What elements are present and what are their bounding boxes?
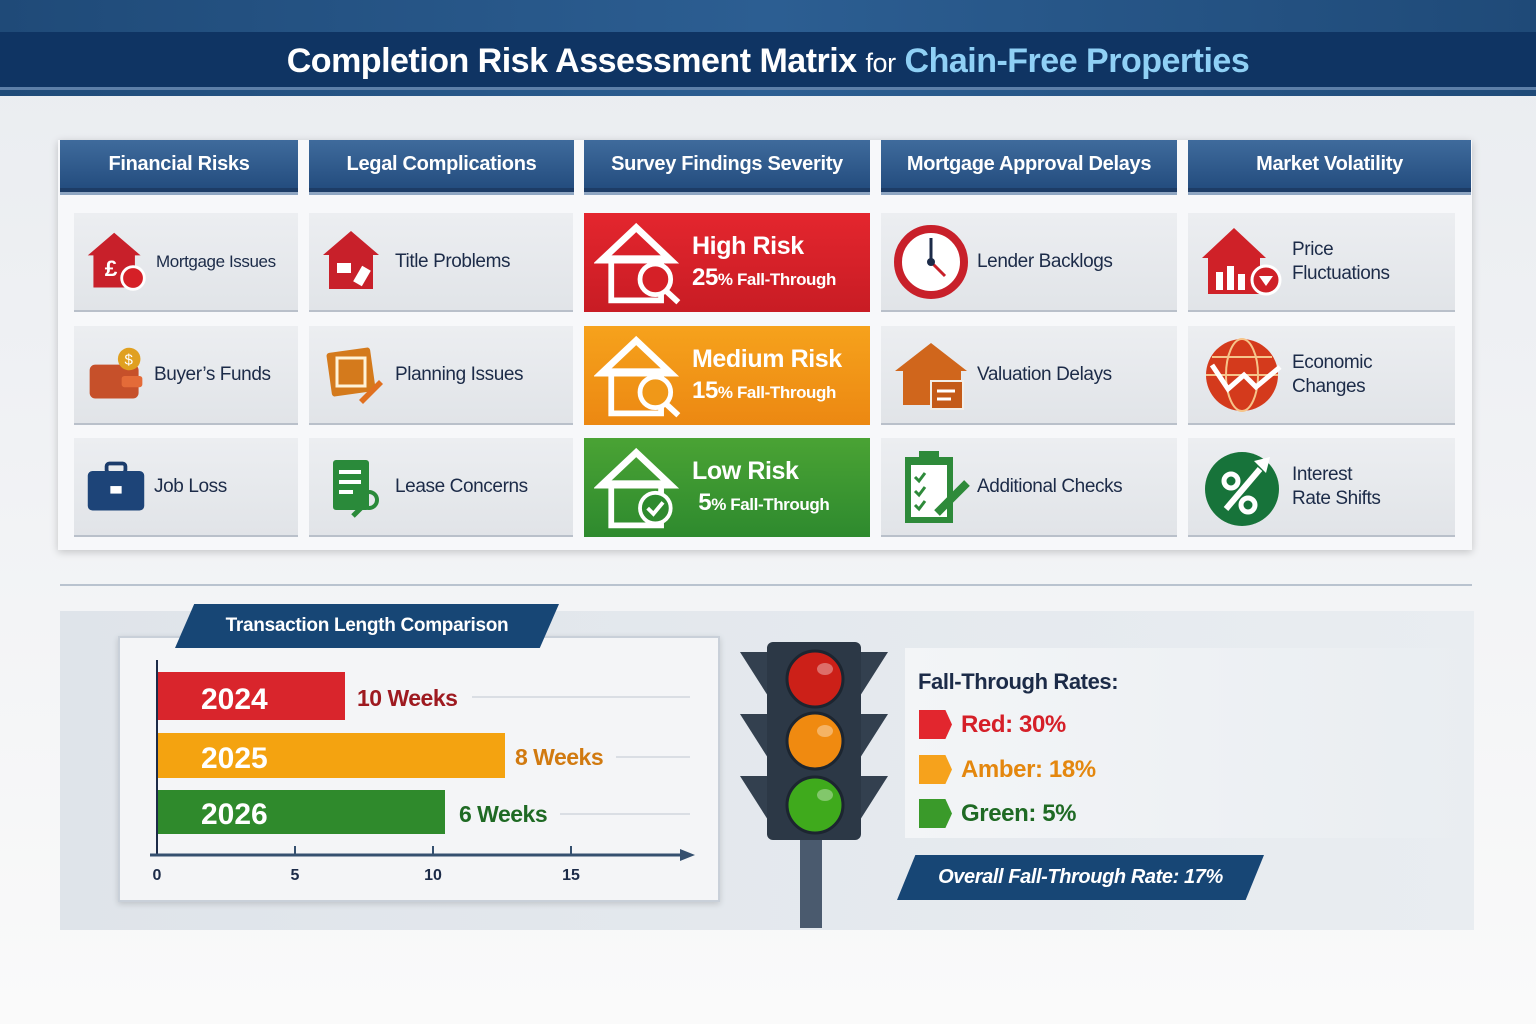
cell: Price Fluctuations: Price [1292,238,1333,260]
cell: Interest Rate Shifts: Interest [1292,464,1352,484]
cell: Economic Changes: Changes [1292,376,1365,396]
cell: Economic Changes: Economic [1292,352,1372,372]
heading: Financial Risks: Financial Risks [108,152,250,174]
cell: Economic Changes [1188,326,1455,425]
chart: transaction length: 2024 [201,683,268,716]
legend: amber: Amber: 18% [961,756,1096,782]
cell: Lease Concerns [309,438,573,537]
panel: matrix [58,140,1472,550]
cell: Mortgage Issues: £ [105,256,118,281]
heading: Mortgage Approval Delays [881,140,1177,192]
legend: fall-through rates [905,648,1148,838]
cell: Price Fluctuations: Fluctuations [1292,262,1390,284]
cell: Medium Risk [584,326,870,425]
heading: Transaction Length Comparison [175,604,559,648]
cell: Buyer's Funds: Buyer’s Funds [154,364,271,384]
cell: Job Loss: Job Loss [154,476,227,496]
cell: Lease Concerns: Lease Concerns [395,476,528,496]
heading: Market Volatility [1188,140,1471,192]
heading: Legal Complications: Legal Complications [347,152,536,174]
cell: Price Fluctuations [1188,213,1455,312]
cell: High Risk: 25% Fall-Through [692,264,836,290]
heading: Mortgage Approval Delays: Mortgage Approval Delays [907,152,1151,174]
cell: High Risk: High Risk [692,232,804,260]
chart: transaction length: 10 [424,867,442,884]
heading: Legal Complications [309,140,574,192]
legend: red [919,710,1066,739]
cell: Additional Checks [881,438,1177,537]
cell: Planning Issues: Planning Issues [395,364,523,384]
heading: Survey Findings Severity: Survey Findings Severity [611,152,843,174]
chart: transaction length: 15 [562,867,580,884]
cell: Low Risk: 5% Fall-Through [698,488,829,516]
cell: Mortgage Issues [74,213,298,312]
cell: Additional Checks: Additional Checks [977,476,1122,496]
callout: overall rate: Overall Fall-Through Rate: 17% [938,866,1223,888]
chart: transaction length: 5 [291,867,300,884]
cell: Interest Rate Shifts [1188,438,1455,537]
heading: Market Volatility: Market Volatility [1256,152,1403,174]
title: Completion Risk Assessment Matrix for Chain-Free Properties [287,42,1249,80]
cell: Buyer's Funds [74,326,298,425]
legend: green [919,799,1076,828]
cell: Lender Backlogs [881,213,1177,312]
cell: Low Risk [584,438,870,537]
heading: Survey Findings Severity [584,140,870,192]
icon: traffic light [740,642,888,928]
cell: Title Problems: Title Problems [395,250,510,272]
cell: Title Problems [309,213,573,312]
chart: transaction length: 6 Weeks [459,801,547,827]
chart: transaction length: 0 [153,867,162,884]
cell: Valuation Delays: Valuation Delays [977,364,1112,384]
cell: Interest Rate Shifts: Rate Shifts [1292,488,1381,508]
cell: Buyer's Funds: $ [124,351,133,368]
panel: bottom [60,611,1474,930]
chart: transaction length [118,636,720,902]
legend: green: Green: 5% [961,800,1076,826]
legend: red: Red: 30% [961,710,1066,738]
header band [0,0,1536,96]
callout: overall rate [897,855,1264,900]
cell: Mortgage Issues: Mortgage Issues [156,252,276,270]
divider [60,584,1472,586]
chart: transaction length: 8 Weeks [515,744,603,770]
cell: Medium Risk: Medium Risk [692,344,842,372]
title bar [0,32,1536,90]
legend title: Fall-Through Rates: [918,669,1118,694]
cell: Valuation Delays [881,326,1177,425]
chart: transaction length: 2026 [201,798,268,831]
cell: Low Risk: Low Risk [692,456,799,484]
chart: transaction length: 10 Weeks [357,685,457,711]
cell: Lender Backlogs: Lender Backlogs [977,250,1113,272]
cell: Planning Issues [309,326,573,425]
chart: transaction length: 2025 [201,742,268,775]
cell: High Risk [584,213,870,312]
heading: Transaction Length Comparison: Transaction Length Comparison [226,615,508,636]
heading: Financial Risks [60,140,298,192]
cell: Medium Risk: 15% Fall-Through [692,376,836,404]
cell: Job Loss [74,438,298,537]
